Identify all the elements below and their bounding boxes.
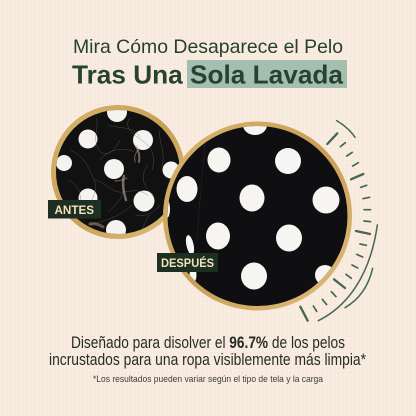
title highlight [187,60,347,88]
embedded hairs [68,118,163,235]
body text: Diseñado para disolver el 96.7% de los pelos [71,334,345,352]
after circle [160,115,356,316]
before circle [50,102,186,241]
title line 2: Tras Una Sola Lavada [72,60,344,90]
body text [49,334,366,369]
title [72,36,347,90]
hair clumps [90,146,139,227]
speed gauge ticks and arcs [300,121,377,321]
polka dots [164,115,340,290]
label: después: DESPUÉS [161,255,214,270]
label: antes: ANTES [54,203,94,217]
gauge ticks [300,133,371,321]
gauge arcs [318,121,377,321]
footnote: *Los resultados pueden variar según el tipo de tela y la carga [93,374,324,385]
polka dots [56,110,178,234]
body text: incrustados para una ropa visiblemente más limpia* [49,351,366,369]
label: después [157,253,218,272]
title line 1: Mira Cómo Desaparece el Pelo [73,36,343,58]
label: antes [48,200,101,218]
